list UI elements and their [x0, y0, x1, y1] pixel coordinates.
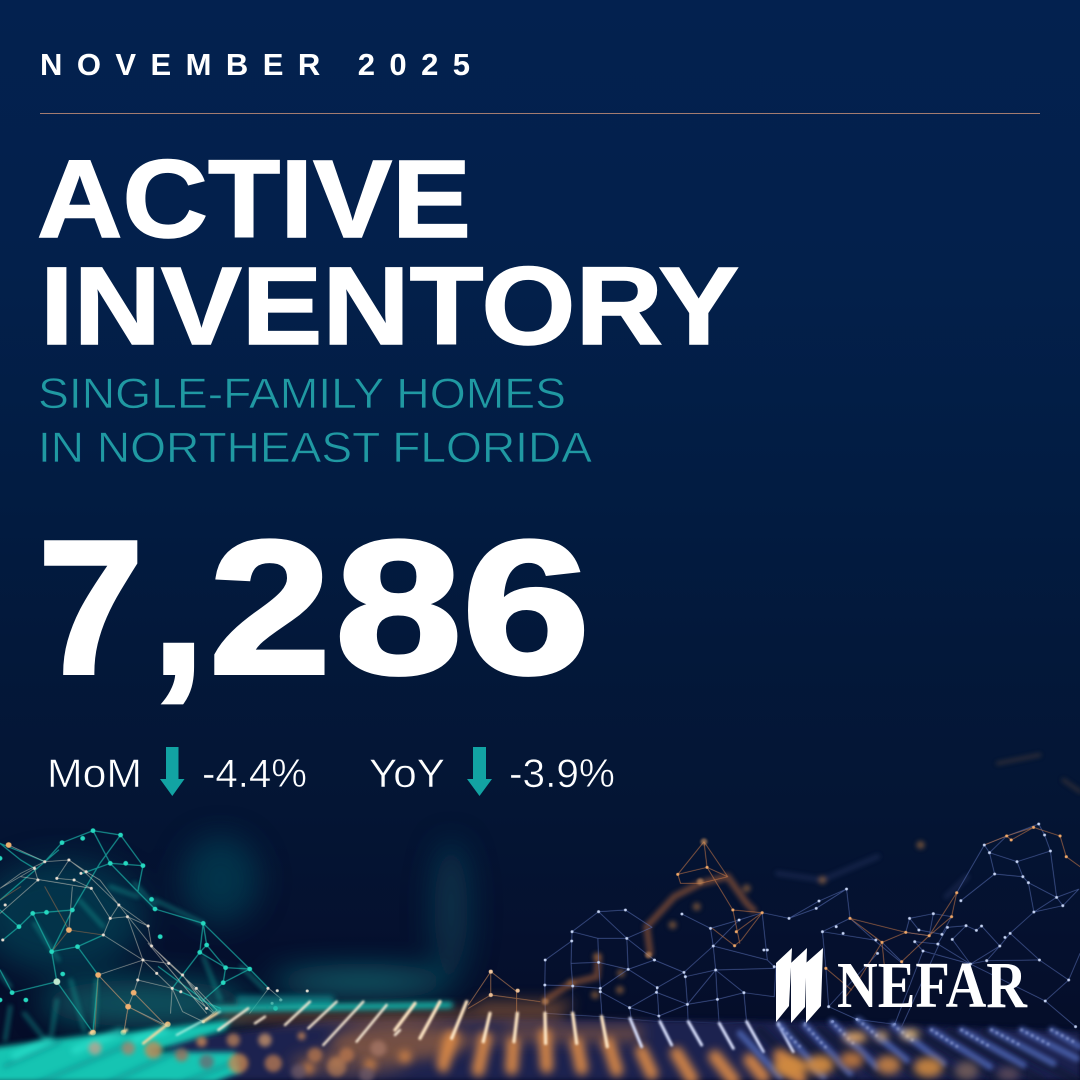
- logo mark: three slanted bars: [776, 948, 823, 1023]
- teal mesh lines: [0, 831, 269, 1033]
- blurred teal glow: [0, 837, 468, 1027]
- out-of-focus teal struts: [0, 883, 265, 1042]
- orange mesh nodes: [678, 827, 1066, 968]
- key figure: active inventory count: 2: [209, 502, 331, 714]
- subtitle: [38, 370, 592, 472]
- orange haze: [225, 1004, 640, 1076]
- date heading: NOVEMBER 2025: [40, 47, 470, 82]
- orange accent lines: [0, 887, 165, 1033]
- pale fine mesh lines: [0, 845, 282, 1032]
- right teal horizon beginning: [468, 972, 540, 1013]
- logo wordmark: NEFAR: [837, 949, 1028, 1022]
- blurred orange ridge: [545, 755, 1080, 1000]
- month-over-month change: -4.4%: [202, 752, 307, 796]
- teal floor glow: [0, 1000, 450, 1080]
- year-over-year change: YoY: [369, 752, 445, 796]
- icon: down arrow: [467, 747, 492, 796]
- floor streaks: right blue bands: [740, 1020, 1080, 1080]
- teal floor highlights: [15, 1030, 165, 1056]
- blue mesh lines: [545, 824, 1080, 1027]
- key figure: active inventory count: [38, 502, 590, 714]
- NEFAR logo: [776, 948, 1028, 1023]
- floor streaks: left section: [88, 1002, 400, 1080]
- blue mesh nodes: [545, 824, 1076, 1027]
- pale mesh nodes: [3, 860, 307, 1022]
- teal floor stripes: [5, 1042, 240, 1080]
- glowing floor of light: [0, 1000, 1080, 1080]
- key figure: active inventory count: 8: [335, 502, 462, 714]
- subtitle: IN NORTHEAST FLORIDA: [38, 424, 592, 472]
- floor streaks: mid section: [308, 1002, 800, 1080]
- year-over-year change: [369, 747, 615, 796]
- right orange and blue data network: [545, 755, 1080, 1027]
- title: INVENTORY: [40, 245, 739, 368]
- cream streak heads: [395, 1002, 793, 1052]
- key figure: active inventory count: 6: [462, 502, 590, 714]
- month-over-month change: MoM: [47, 752, 142, 796]
- darker floor stripes: [760, 1030, 1075, 1080]
- orange mesh lines: [678, 827, 1080, 1000]
- title: ACTIVE: [37, 138, 471, 261]
- key figure: active inventory count: 7: [38, 502, 144, 714]
- orange blobs: [773, 1030, 1020, 1080]
- month-over-month change: [47, 747, 307, 796]
- bokeh dots: [88, 1032, 386, 1080]
- orange out-of-focus tails: [308, 1035, 800, 1080]
- year-over-year change: -3.9%: [509, 752, 615, 796]
- icon: down arrow: [160, 747, 184, 796]
- left teal data network: [0, 831, 540, 1042]
- title: [37, 138, 739, 368]
- divider rule: [40, 113, 1040, 114]
- bright teal nodes: [0, 831, 276, 1008]
- subtitle: SINGLE-FAMILY HOMES: [38, 370, 566, 418]
- warm nodes: [9, 845, 168, 1033]
- floor base: [170, 1018, 1080, 1080]
- key figure: active inventory count: ,: [152, 502, 205, 714]
